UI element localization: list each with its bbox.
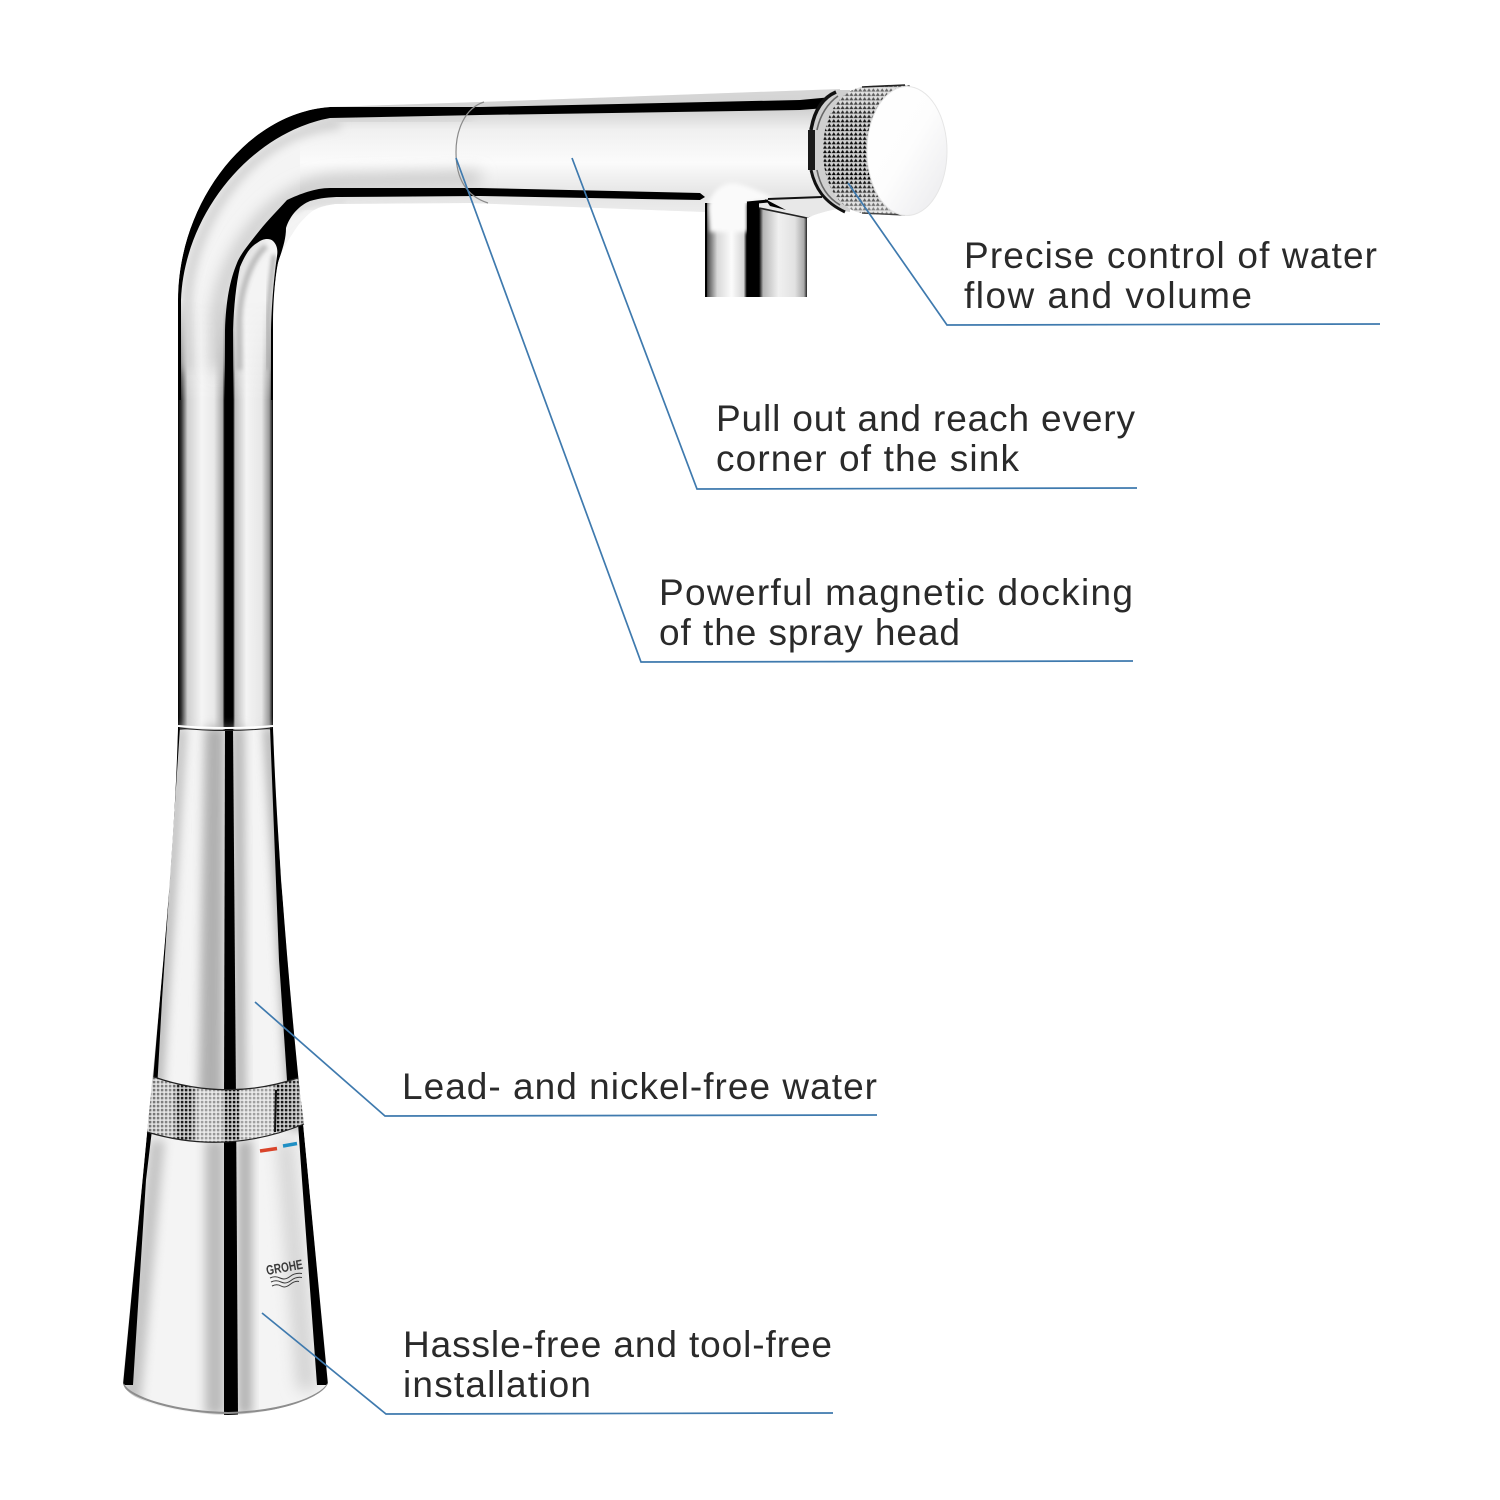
control dial <box>808 85 947 216</box>
callout: water flow control <box>848 183 1380 325</box>
callout: pull out: Pull out and reach every <box>716 398 1136 439</box>
column seam <box>178 726 273 730</box>
callout: installation: installation <box>403 1364 591 1405</box>
GROHE logo <box>265 1257 304 1287</box>
central dark reflection <box>224 727 238 1415</box>
dial cap <box>867 86 947 216</box>
spout seam <box>456 102 488 203</box>
faucet body <box>110 80 850 1420</box>
knurled ring <box>146 1076 304 1143</box>
callout: lead-free water <box>255 1002 877 1116</box>
callout: pull out: corner of the sink <box>716 438 1020 479</box>
callout: magnetic docking <box>456 158 1133 662</box>
dial collar <box>808 90 850 212</box>
faucet illustration <box>110 80 947 1420</box>
upper column <box>178 295 273 730</box>
black wedge <box>747 204 759 235</box>
inner dark reflection <box>225 188 705 400</box>
cold water mark <box>283 1144 297 1146</box>
callout: pull out <box>572 158 1137 489</box>
right dark reflection <box>270 727 328 1385</box>
hot water mark <box>260 1148 277 1151</box>
outer dark reflection <box>178 97 832 400</box>
callout: magnetic docking: of the spray head <box>659 612 960 653</box>
spout surface <box>300 84 840 215</box>
callout: magnetic docking: Powerful magnetic docking <box>659 572 1133 613</box>
outlet neck highlight <box>708 183 775 232</box>
knurled grip <box>823 85 910 216</box>
left dark reflection <box>123 727 180 1385</box>
junction plate <box>759 203 814 218</box>
outlet <box>705 184 822 297</box>
base rim <box>123 1384 328 1413</box>
callout: installation: Hassle-free and tool-free <box>403 1324 832 1365</box>
GROHE logo: GROHE <box>265 1257 304 1278</box>
elbow shading <box>187 116 480 370</box>
callout: water flow control: Precise control of water <box>964 235 1377 276</box>
junction reflections <box>746 196 822 219</box>
lower column <box>148 727 303 1130</box>
callout: water flow control: flow and volume <box>964 275 1252 316</box>
callout: lead-free water: Lead- and nickel-free water <box>402 1066 877 1107</box>
base shading <box>120 1140 316 1415</box>
callout: installation <box>262 1313 833 1414</box>
